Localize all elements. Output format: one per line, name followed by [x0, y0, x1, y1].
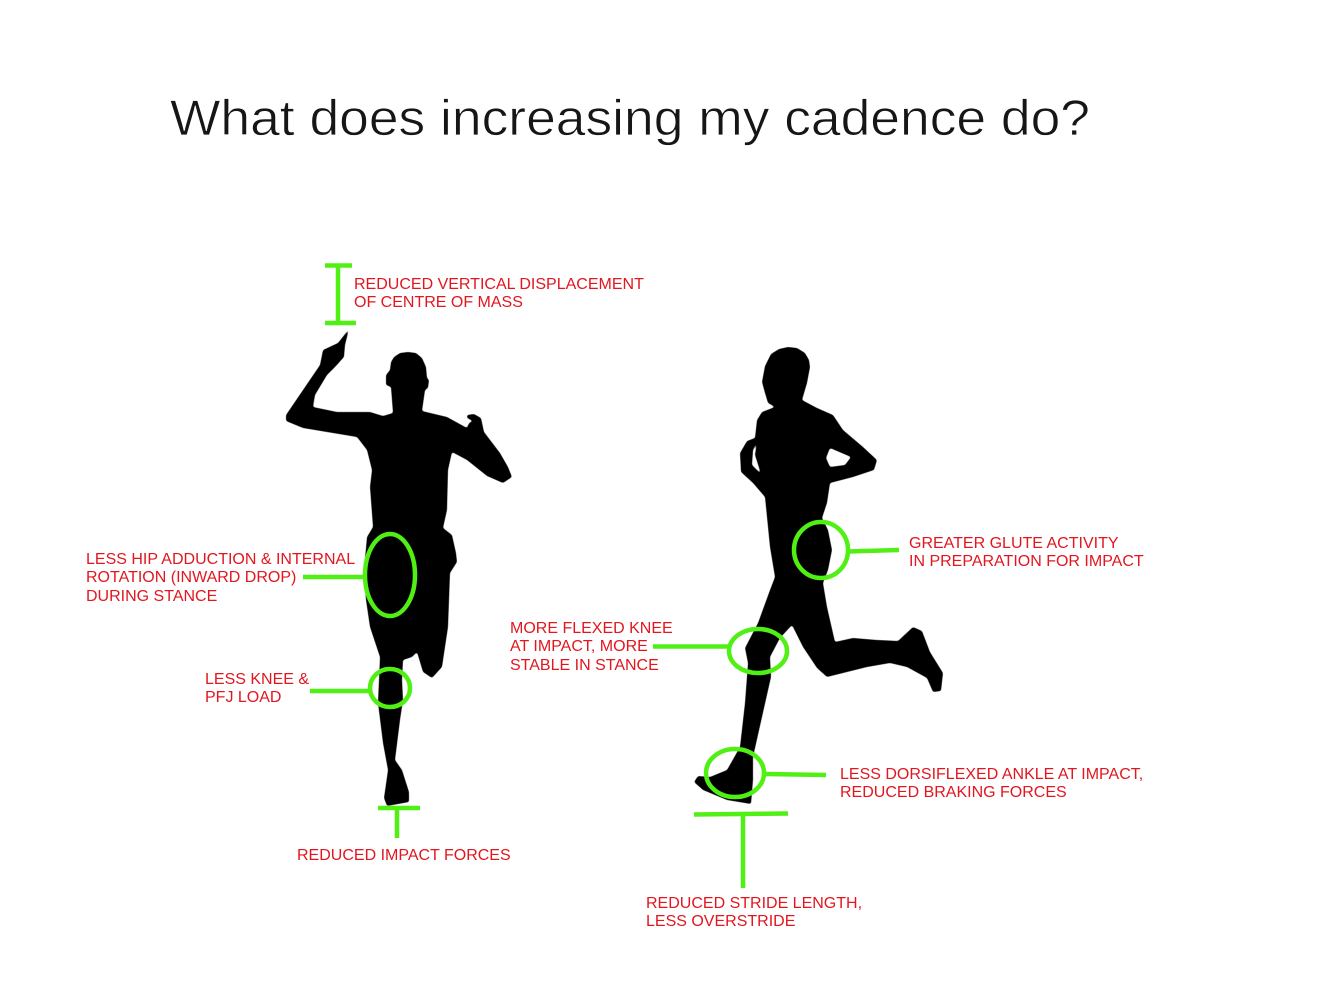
label: impact forces: REDUCED IMPACT FORCES	[297, 847, 511, 864]
label: vertical displacement: REDUCED VERTICAL DISPLACEMENT	[354, 276, 644, 293]
marker: ankle ellipse	[706, 749, 826, 797]
label: hip adduction: DURING STANCE	[86, 588, 217, 605]
runner silhouette: side view	[694, 347, 943, 804]
label: knee load: LESS KNEE &	[205, 671, 309, 688]
label: flexed knee: STABLE IN STANCE	[510, 657, 659, 674]
marker: stride length bracket	[694, 814, 788, 888]
label: ankle: REDUCED BRAKING FORCES	[840, 784, 1067, 801]
marker: flexed knee ellipse	[653, 629, 787, 673]
label: flexed knee: AT IMPACT, MORE	[510, 638, 648, 655]
label: stride length: REDUCED STRIDE LENGTH,	[646, 895, 862, 912]
label: stride length: LESS OVERSTRIDE	[646, 913, 795, 930]
marker: impact forces bracket	[378, 808, 420, 838]
marker: vertical displacement bracket	[325, 265, 356, 323]
label: glute activity: GREATER GLUTE ACTIVITY	[909, 535, 1119, 552]
marker: knee circle front view	[310, 669, 410, 707]
marker: glute circle	[794, 522, 899, 578]
label: vertical displacement: OF CENTRE OF MASS	[354, 294, 523, 311]
label: knee load: PFJ LOAD	[205, 689, 281, 706]
label: flexed knee: MORE FLEXED KNEE	[510, 620, 673, 637]
label: hip adduction: ROTATION (INWARD DROP)	[86, 569, 296, 586]
marker: hip ellipse	[303, 534, 415, 616]
label: hip adduction: LESS HIP ADDUCTION & INTERNAL	[86, 551, 355, 568]
runner silhouette: front view	[286, 329, 512, 806]
label: ankle: LESS DORSIFLEXED ANKLE AT IMPACT,	[840, 766, 1143, 783]
label: glute activity: IN PREPARATION FOR IMPACT	[909, 553, 1144, 570]
title: What does increasing my cadence do?	[170, 90, 1090, 146]
